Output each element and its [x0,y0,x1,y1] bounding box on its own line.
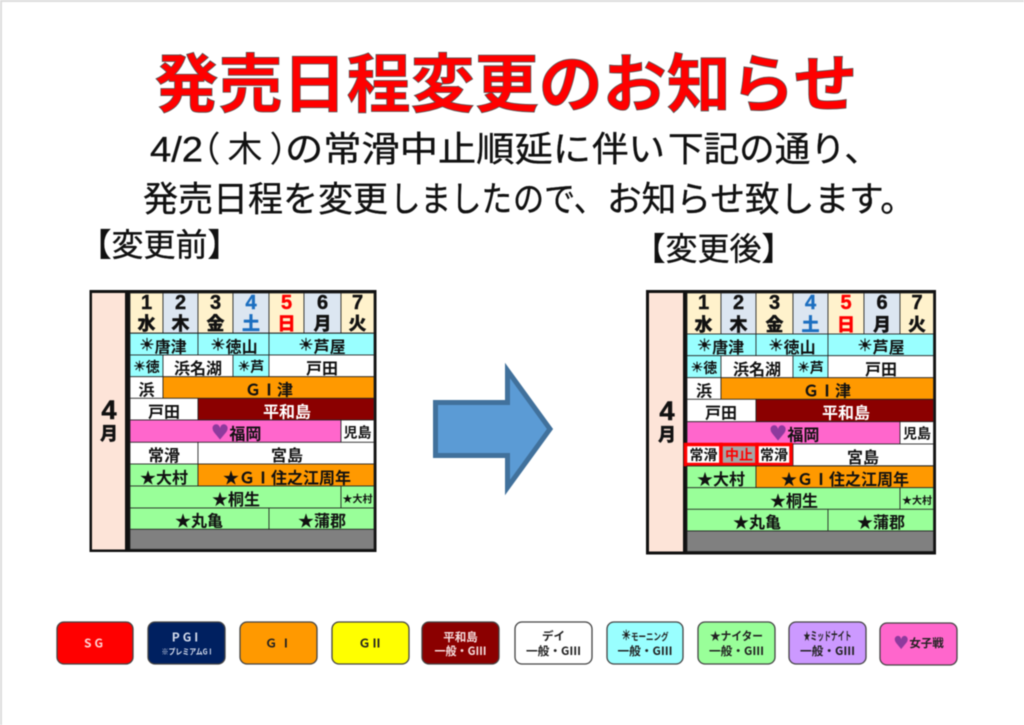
race rows: 児島 [344,422,372,442]
race rows: 浜名湖 [733,356,781,380]
race rows: ★大村 [342,490,372,506]
race rows: 平和島 [822,400,870,424]
month column: 4 [101,395,117,425]
race rows: ♥福岡 [769,422,819,446]
race rows: 常滑 [148,442,180,466]
legend: nighter: ★ナイター [710,628,763,644]
legend: GI [240,622,317,664]
date header: 7 [911,292,923,314]
race rows: ☀唐津 [697,334,744,358]
date header: 1 [141,292,152,314]
legend: morning: 一般・GⅢ [618,643,672,659]
race rows: ★桐生 [770,488,818,512]
month column [649,293,683,552]
legend: morning: ☀モーニング [622,628,668,644]
cancelled date cells: 常滑 [760,445,788,465]
race rows: ♥福岡 [211,420,261,444]
legend: Heiwajima: 平和島 [443,629,478,645]
notice text: しました [390,180,512,220]
race rows: ★丸亀 [733,509,781,533]
legend: women's race [880,623,957,665]
race rows: ☀徳山 [768,334,816,358]
date header: 火 [348,310,366,336]
date header: 木 [172,310,190,336]
legend: day: 一般・GⅢ [526,643,581,659]
race rows: ☀唐津 [139,334,187,358]
notice text: 4/2 [150,130,203,170]
legend: day [515,622,592,664]
date header: 5 [840,292,852,314]
date header: 火 [908,311,926,337]
notice text: 下記の通り、 [668,130,880,170]
legend: GII [332,622,409,664]
date header: 金 [206,310,224,336]
legend: SG [57,622,133,664]
legend [57,622,957,665]
legend: GII: ＧⅡ [358,634,383,652]
date header [687,292,934,337]
notice text: 発売日程を変更 [143,180,388,220]
legend: PGI: ※プレミアムG I [162,646,212,658]
race rows: 浜 [138,376,155,400]
date header [130,292,374,336]
race rows: ★大村 [902,492,932,507]
date header: 木 [730,311,748,337]
legend: nighter [698,622,775,664]
date header: 6 [317,292,328,314]
race rows: 戸田 [865,356,897,380]
race rows: ★大村 [140,464,188,488]
race rows: ★桐生 [212,486,260,510]
date header: 3 [210,292,221,314]
race rows: ☀徳 [133,357,160,377]
race rows: ★ＧⅠ住之江周年 [223,464,351,488]
date header: 6 [876,292,888,314]
race rows: 浜名湖 [174,355,222,379]
legend: midnight: 一般・GⅢ [800,643,855,659]
schedule table: after change [646,290,936,554]
date header: 3 [769,292,780,314]
race rows: ★蒲郡 [857,509,905,533]
race rows: 宮島 [847,444,879,468]
cancelled date cells: 常滑 [690,445,718,465]
date header: 月 [873,311,891,337]
race rows: 児島 [903,424,931,444]
date header: 5 [281,292,292,314]
date header: 金 [766,311,784,337]
notice text: 伴い [592,130,665,170]
race rows: ★大村 [697,466,745,490]
race rows: ☀徳 [691,358,717,378]
date header: 月 [314,310,332,336]
month column: 月 [658,421,676,447]
race rows: ★丸亀 [175,508,223,532]
date header: 土 [242,310,260,336]
race rows: ★ＧⅠ住之江周年 [781,466,909,490]
legend: day: デイ [542,628,565,644]
schedule table: before change [90,290,376,552]
race rows: ＧⅠ津 [803,378,851,402]
notice text: 木 [227,130,263,170]
date header: 4 [245,292,257,314]
race rows: ＧⅠ津 [245,376,293,400]
date header: 2 [175,292,186,314]
race rows: 浜 [696,378,712,402]
date header: 7 [352,292,363,314]
title: 発売日程変更のお知らせ [154,49,858,121]
legend: women's race: ♥女子戦 [893,632,944,654]
notice text: ） [269,130,305,170]
race rows: 平和島 [263,398,311,422]
race rows: ☀芦屋 [298,334,346,358]
legend: midnight: ★ミッドナイト [804,628,852,644]
race rows: 宮島 [271,442,303,466]
race rows: ☀芦 [797,358,824,378]
heading: after change: 【変更後】 [633,231,794,267]
race rows: 戸田 [306,355,338,379]
date header: 2 [733,292,744,314]
cancelled date cells: 中止 [725,445,753,465]
race rows [130,333,374,549]
legend: midnight [789,622,866,664]
notice text: ので、 [513,180,605,220]
race rows: ☀徳山 [210,334,258,358]
arrow [436,370,550,488]
legend: PGI [148,622,225,664]
month column: 月 [100,420,118,446]
month column [92,293,125,550]
legend: SG: SG [84,634,106,652]
date header: 水 [694,311,712,337]
date header: 4 [805,292,817,314]
race rows [686,334,934,552]
notice text: （ [185,130,221,170]
date header: 水 [138,310,156,336]
legend: PGI: PGI [172,628,201,646]
date header: 土 [802,311,820,337]
month column: 4 [659,396,675,426]
legend: morning [607,622,683,664]
race rows: ☀芦 [238,357,264,377]
race rows: 戸田 [705,400,737,424]
legend: Heiwajima: 一般・GⅢ [434,643,486,659]
legend: nighter: 一般・GⅢ [709,643,764,659]
heading: before change: 【変更前】 [79,227,240,263]
race rows: ☀芦屋 [857,334,905,358]
cancelled date cells [686,444,791,465]
notice text [143,130,915,220]
notice text: お知らせ致します。 [607,180,915,220]
legend: Heiwajima [422,622,499,664]
date header: 1 [698,292,709,314]
race rows: 戸田 [148,398,180,422]
notice text: の常滑中止順延に [285,130,591,170]
date header: 日 [837,311,855,337]
legend: GI: Ｇ Ⅰ [265,634,292,652]
race rows: ★蒲郡 [298,508,346,532]
date header: 日 [278,310,296,336]
